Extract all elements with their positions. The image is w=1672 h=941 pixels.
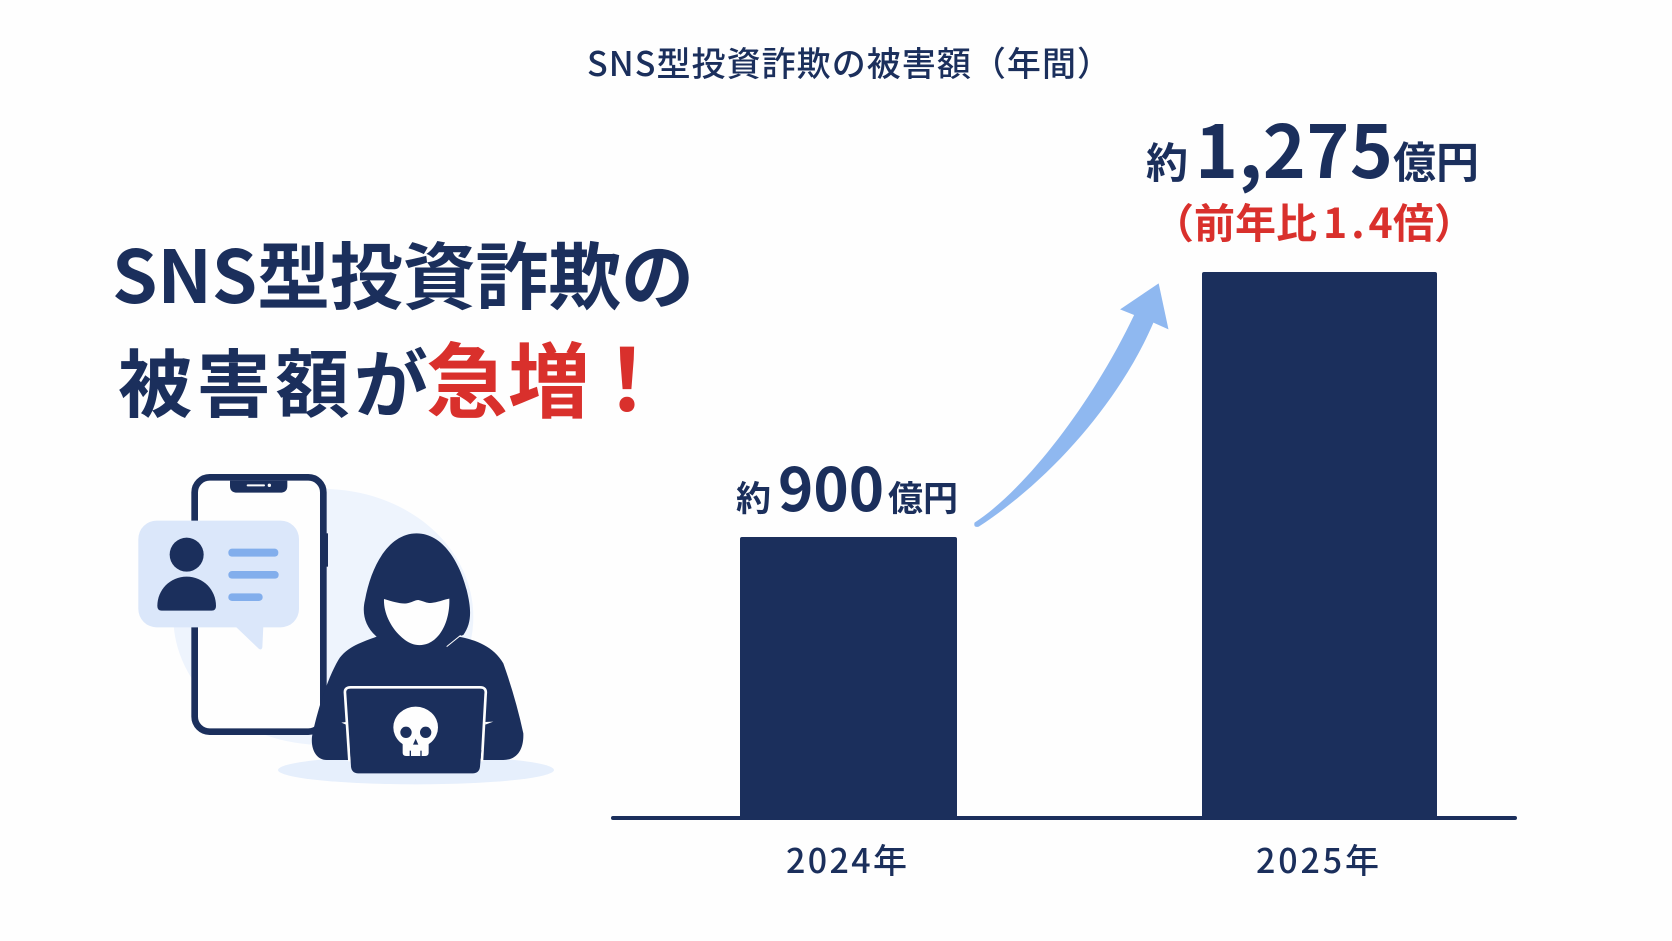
growth arrow — [974, 283, 1168, 527]
background circle — [173, 489, 473, 745]
value: 2024: 約 — [736, 471, 771, 522]
value: 2025: 1,275 — [1195, 94, 1394, 200]
headline line 1: SNS型投資詐欺の — [112, 219, 694, 325]
icon: chat bubble with profile — [138, 521, 299, 649]
label: 2025: 2025年 — [1256, 834, 1379, 883]
headline emphasis: 急増 — [426, 316, 590, 435]
headline emphasis: ！ — [584, 311, 670, 436]
illustration: hacker with phone — [138, 477, 554, 784]
value: 2025: 約 — [1146, 130, 1188, 191]
value: 2025: 億円 — [1393, 129, 1479, 191]
value: 2024: 900 — [778, 442, 884, 529]
icon: skull — [393, 707, 438, 756]
icon: hooded hacker — [312, 533, 523, 760]
growth ratio: （前年比 — [1153, 190, 1317, 250]
axis line — [611, 816, 1517, 820]
icon: laptop with skull — [341, 687, 493, 773]
ground shadow — [278, 756, 554, 784]
bar: 2025 — [1202, 272, 1437, 820]
bar chart — [611, 272, 1517, 883]
value: 2024: 億円 — [888, 471, 958, 522]
bar: 2024 — [740, 537, 957, 820]
chart title: SNS型投資詐欺の被害額（年間） — [587, 37, 1111, 86]
growth ratio: 1.4 — [1323, 190, 1397, 250]
headline — [112, 219, 694, 436]
growth ratio: 倍） — [1393, 190, 1475, 250]
label: 2024: 2024年 — [786, 834, 907, 883]
headline line 2: 被害額が — [118, 326, 428, 433]
icon: smartphone — [195, 477, 328, 732]
